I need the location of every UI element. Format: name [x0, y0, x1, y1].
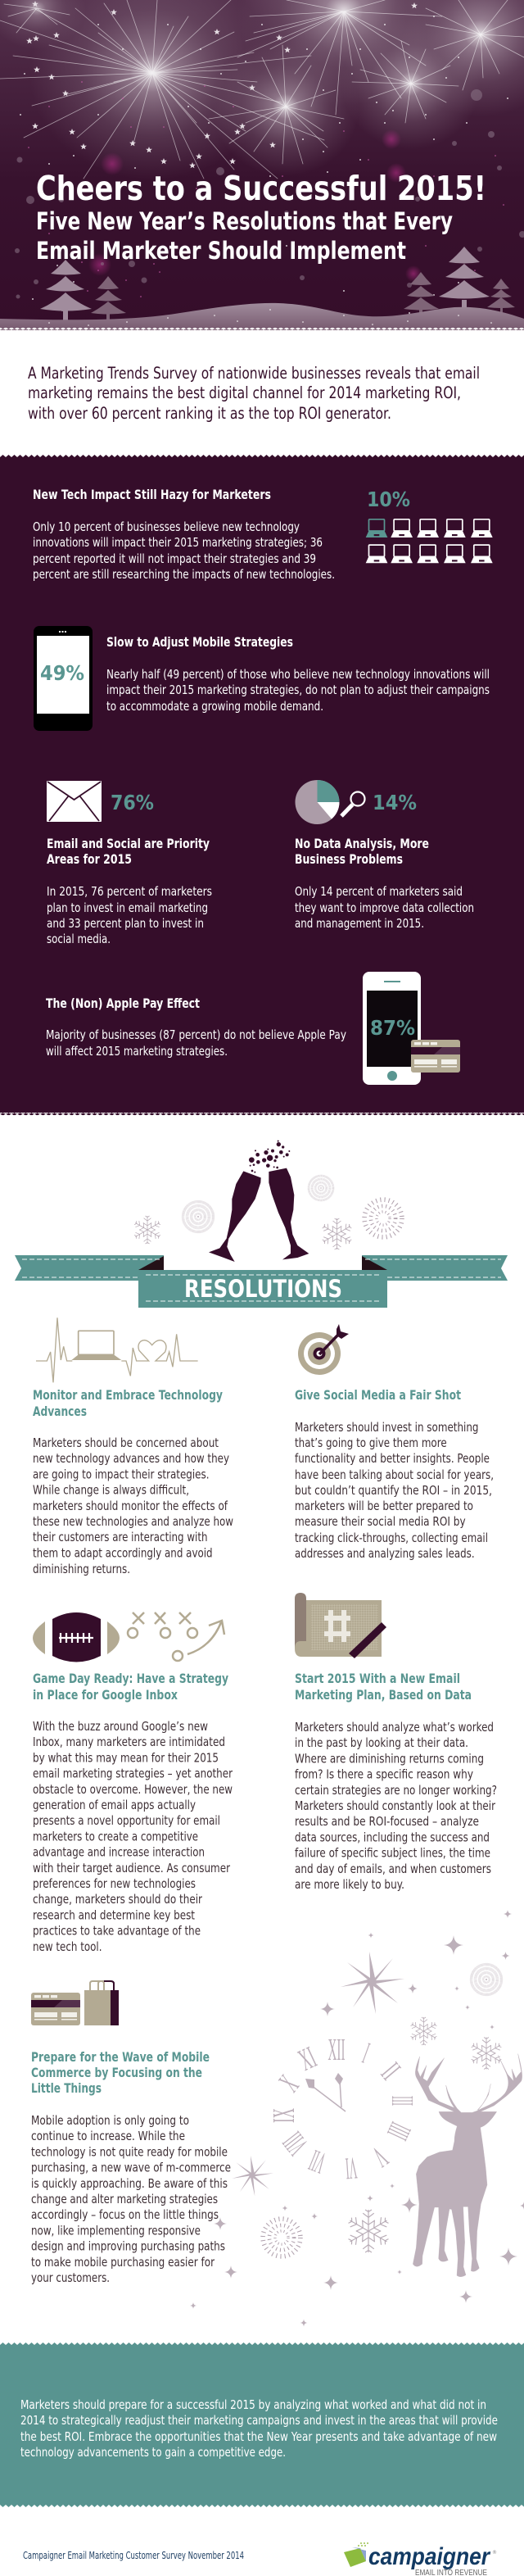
heading: no data analysis [295, 836, 429, 867]
heading: email and social: Areas for 2015 [47, 851, 132, 867]
text block: practices to take advantage of the [33, 1924, 201, 1939]
text: new tech [33, 519, 335, 582]
text: email and social: In 2015, 76 percent of marketers [47, 884, 212, 899]
text: mobile strategies [106, 667, 490, 714]
icon: heartbeat laptop [36, 1317, 198, 1382]
heading: Prepare for the Wave of Mobile [31, 2049, 210, 2065]
panel: mobile commerce [31, 1981, 231, 2285]
icons: ten laptops [366, 519, 493, 563]
heading: no data analysis: Business Problems [295, 851, 403, 867]
text block: from? Is there a specific reason why [295, 1767, 473, 1782]
heading: Start 2015 With a New Email [295, 1671, 460, 1686]
panel: game day [33, 1612, 233, 1954]
text: new tech: innovations will impact their 2015 marketing strategies; 36 [33, 535, 323, 550]
logo: campaigner: ® [492, 2550, 497, 2556]
heading: email and social [47, 836, 210, 867]
text block: results and be ROI-focused – analyze [295, 1814, 479, 1829]
title [36, 169, 486, 265]
text block: your customers. [31, 2270, 110, 2285]
heading: in Place for Google Inbox [33, 1687, 178, 1703]
text: apple pay: will affect 2015 marketing strategies. [46, 1044, 228, 1059]
heading: Give Social Media a Fair Shot [295, 1387, 461, 1403]
clock face: VIII [277, 2125, 314, 2161]
text block: preferences for new technologies [33, 1876, 196, 1891]
sparkle dots [20, 16, 508, 324]
clock face: I [359, 2037, 373, 2070]
text block: technology is not quite ready for mobile [31, 2144, 228, 2159]
text: no data analysis [295, 884, 474, 931]
text: email and social: and 33 percent plan to invest in [47, 916, 204, 931]
heading: Game Day Ready: Have a Strategy [33, 1671, 228, 1686]
text block: obstacle to overcome. However, the new [33, 1782, 233, 1797]
illustration: deer [413, 2054, 522, 2277]
icon: phone with credit card 87% [363, 972, 460, 1085]
text block: that’s going to give them more [295, 1435, 447, 1450]
text block: advantage and increase interaction [33, 1845, 205, 1860]
text block: presents a novel opportunity for email [33, 1813, 220, 1828]
heading [33, 1387, 223, 1419]
panel: survey statistics [0, 455, 524, 1115]
icon: smartphone 49%: 49% [40, 661, 84, 685]
footer source: Campaigner Email Marketing Customer Survey November 2014 [23, 2550, 244, 2561]
text block: measure their social media ROI by [295, 1514, 466, 1529]
clock face: III [385, 2096, 419, 2106]
icon: football and play diagram [33, 1612, 224, 1662]
heading: Advances [33, 1404, 87, 1419]
icon: champagne glasses [209, 1141, 309, 1262]
text block: email marketing strategies – yet another [33, 1766, 233, 1781]
banner: resolutions [15, 1255, 508, 1308]
heading [295, 1671, 472, 1703]
text block: accordingly – focus on the little things [31, 2207, 219, 2222]
text block: technology advancements to gain a competitive edge. [20, 2445, 286, 2460]
clock face: V [366, 2139, 394, 2174]
panel: marketing plan [295, 1593, 497, 1892]
text block [295, 1420, 494, 1561]
heading: mobile strategies: Slow to Adjust Mobile Strategies [106, 634, 293, 650]
text block: by what this may mean for their 2015 [33, 1750, 219, 1765]
text: new tech: Only 10 percent of businesses believe new technology [33, 519, 300, 534]
text block: change, marketers should do their [33, 1892, 203, 1907]
text block: With the buzz around Google’s new [33, 1719, 208, 1734]
text block [31, 2113, 231, 2285]
text: new tech: percent reported it will not impact their strategies and 39 [33, 551, 316, 566]
text block: purchasing, a new wave of m-commerce [31, 2161, 231, 2175]
icon: envelope [47, 781, 102, 822]
clock face: IX [267, 2108, 301, 2123]
clock face [267, 2033, 419, 2185]
heading: Marketing Plan, Based on Data [295, 1687, 472, 1703]
clock face: XII [328, 2033, 346, 2067]
text block: with their target audience. As consumer [33, 1861, 231, 1875]
decoration: stars and snowflakes [190, 1910, 524, 2327]
clock face: VI [345, 2151, 358, 2185]
text block: marketers will be better prepared to [295, 1499, 473, 1513]
text block: now, like implementing responsive [31, 2223, 201, 2238]
heading [31, 2049, 210, 2096]
stat: 10%: 10% [367, 488, 410, 511]
heading: apple pay: The (Non) Apple Pay Effect [46, 995, 200, 1011]
clock face: VII [305, 2143, 331, 2180]
text block: generation of email apps actually [33, 1798, 196, 1812]
snowy hill [0, 303, 524, 328]
heading [33, 1671, 228, 1703]
heading: Monitor and Embrace Technology [33, 1387, 223, 1403]
clock face: II [374, 2057, 407, 2086]
text block: design and improving purchasing paths [31, 2239, 225, 2254]
text block: diminishing returns. [33, 1562, 130, 1576]
text: mobile strategies: to accommodate a growing mobile demand. [106, 699, 323, 714]
icon: pie chart and magnifier [295, 780, 365, 824]
text block: research and determine key best [33, 1907, 195, 1922]
fireworks bursts [0, 0, 524, 179]
text: email and social [47, 884, 212, 946]
icon: credit card and shopping bag [31, 1981, 119, 2025]
text block: change and alter marketing strategies [31, 2192, 218, 2206]
intro text: with over 60 percent ranking it as the top ROI generator. [28, 404, 391, 423]
text: no data analysis: and management in 2015. [295, 916, 424, 931]
text block: marketers should monitor the effects of [33, 1499, 228, 1513]
panel: conclusion [0, 2342, 524, 2507]
ornaments around glasses [133, 1176, 402, 1249]
heading: new tech: New Tech Impact Still Hazy for Marketers [33, 487, 271, 502]
text block [295, 1720, 497, 1892]
panel: social media [295, 1324, 494, 1561]
background glows [0, 0, 524, 282]
text block: Marketers should be concerned about [33, 1435, 219, 1450]
text block: new technology advances and how they [33, 1451, 229, 1466]
text: email and social: social media. [47, 932, 111, 946]
logo: campaigner: campaigner [368, 2543, 491, 2570]
title: Email Marketer Should Implement [36, 237, 406, 265]
heading: Commerce by Focusing on the [31, 2065, 202, 2080]
text block [33, 1435, 233, 1576]
text block: their customers are interacting with [33, 1530, 208, 1544]
banner: resolutions: RESOLUTIONS [184, 1275, 342, 1303]
text block: While change is always difficult, [33, 1483, 189, 1498]
panel: hero banner [0, 0, 524, 330]
heading: email and social: Email and Social are Priority [47, 836, 210, 851]
stat: 14%: 14% [373, 791, 417, 814]
icon: phone with credit card 87%: 87% [370, 1016, 415, 1040]
panel: monitor technology [33, 1317, 233, 1576]
clock face: XI [293, 2040, 322, 2078]
text block: continue to increase. While the [31, 2129, 185, 2143]
intro text [28, 364, 480, 423]
text: no data analysis: Only 14 percent of marketers said [295, 884, 463, 899]
text block [33, 1719, 233, 1954]
icon: dart target [298, 1324, 349, 1375]
falling stars [26, 1, 418, 168]
text block: addresses and analyzing sales leads. [295, 1546, 475, 1561]
text block: these new technologies and analyze how [33, 1514, 233, 1529]
heading: no data analysis: No Data Analysis, More [295, 836, 429, 851]
icon: smartphone 49% [34, 626, 93, 731]
text block: in the past by looking at their data. [295, 1735, 468, 1750]
text block: to make mobile purchasing easier for [31, 2255, 215, 2270]
text: no data analysis: they want to improve data collection [295, 900, 474, 915]
text block: them to adapt accordingly and avoid [33, 1546, 213, 1561]
text: new tech: percent are still researching the impacts of new technologies. [33, 567, 335, 582]
text block: Mobile adoption is only going to [31, 2113, 189, 2128]
text block: are going to impact their strategies. [33, 1467, 210, 1481]
clock face: IIII [380, 2117, 418, 2145]
text block: Marketers should invest in something [295, 1420, 478, 1435]
text block: Inbox, many marketers are intimidated [33, 1735, 225, 1749]
text: apple pay: Majority of businesses (87 percent) do not believe Apple Pay [46, 1027, 346, 1042]
clock hands [305, 2073, 346, 2111]
icon: blueprint and ruler [295, 1593, 386, 1658]
logo: campaigner [344, 2543, 497, 2576]
heading: Little Things [31, 2080, 102, 2096]
text: email and social: plan to invest in email marketing [47, 900, 208, 915]
text: apple pay [46, 1027, 346, 1059]
text block: Where are diminishing returns coming [295, 1751, 484, 1766]
bokeh circles [15, 89, 524, 298]
text block: is quickly approaching. Be aware of this [31, 2176, 228, 2191]
text block: new tech tool. [33, 1939, 102, 1954]
clock face: X [273, 2069, 305, 2098]
trees [40, 247, 515, 321]
stat: 76%: 76% [111, 791, 154, 814]
hill snow dots [49, 310, 491, 325]
text block: marketers to create a competitive [33, 1829, 198, 1844]
text block [20, 2397, 498, 2460]
text block: are more likely to buy. [295, 1877, 404, 1892]
